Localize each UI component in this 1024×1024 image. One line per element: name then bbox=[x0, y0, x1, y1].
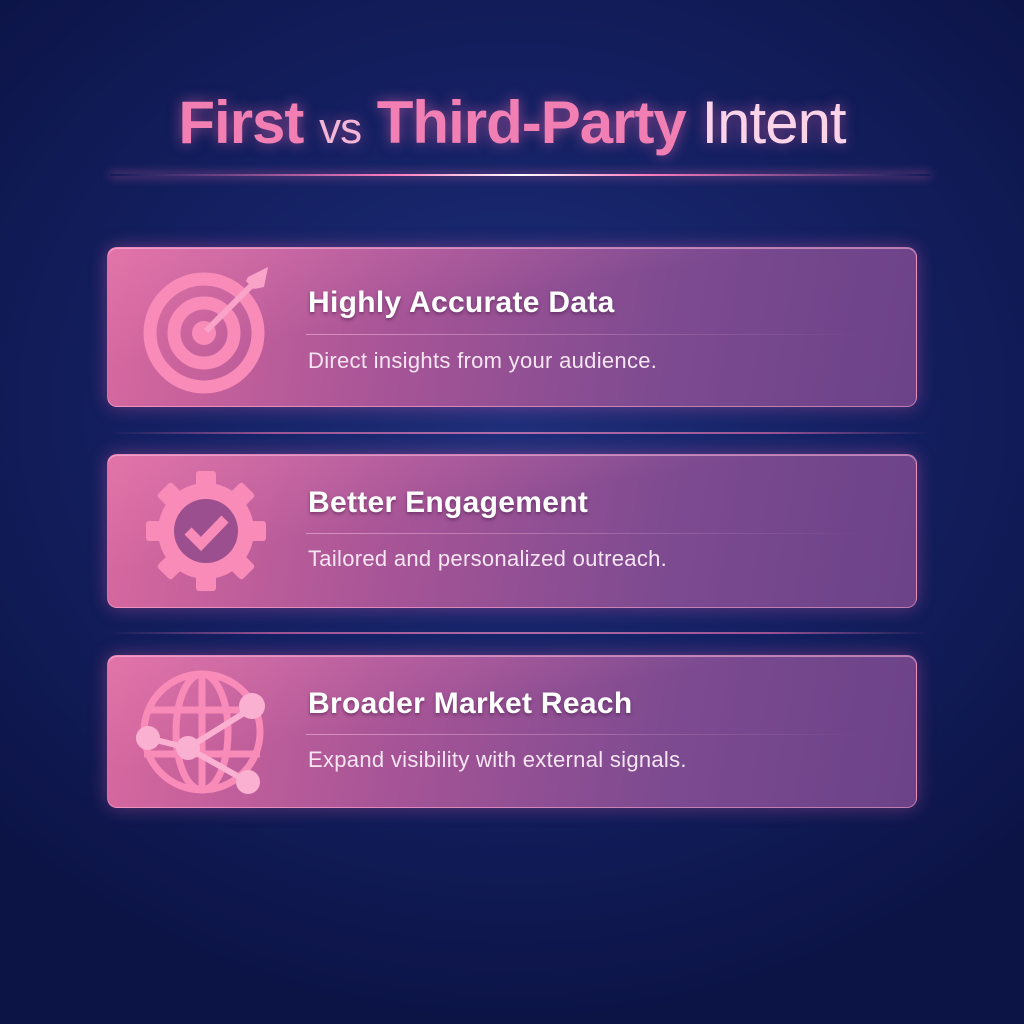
panel: better engagement bbox=[107, 454, 917, 608]
text: Tailored and personalized outreach. bbox=[308, 546, 667, 571]
title: First vs Third-Party Intent bbox=[178, 89, 846, 156]
panel: broader market reach bbox=[107, 655, 917, 808]
icon: gear check bbox=[146, 471, 266, 591]
text: Expand visibility with external signals. bbox=[308, 747, 687, 772]
text: Direct insights from your audience. bbox=[308, 348, 657, 373]
heading: Broader Market Reach bbox=[308, 687, 632, 720]
icon: globe network bbox=[136, 670, 265, 794]
icon: target bbox=[144, 267, 268, 394]
panel: highly accurate data bbox=[107, 247, 917, 407]
heading: Better Engagement bbox=[308, 486, 588, 519]
heading: Highly Accurate Data bbox=[308, 286, 615, 319]
